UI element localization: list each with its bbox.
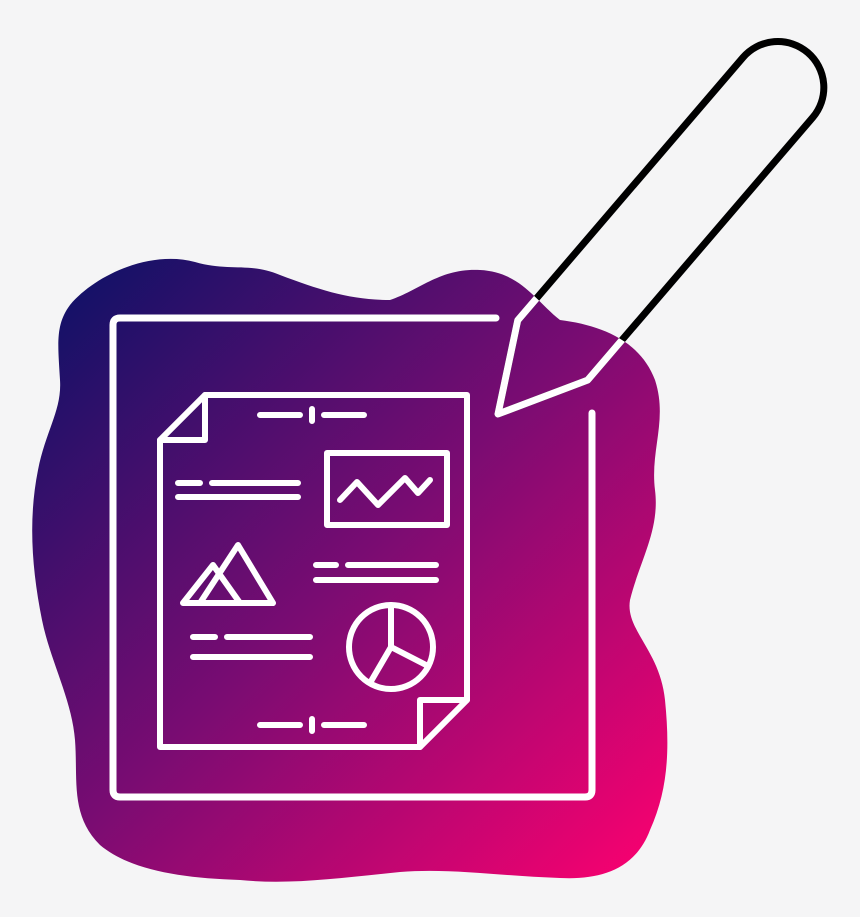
mountains icon: [183, 545, 273, 603]
pie chart: [349, 605, 433, 689]
document: [160, 395, 467, 747]
blob background: [32, 259, 667, 882]
text lines left top: [178, 483, 298, 497]
pencil white part over blob: [494, 296, 625, 418]
header dashes: [260, 409, 364, 421]
pencil: [463, 23, 843, 444]
chart box: [327, 453, 447, 525]
page outline: [160, 395, 467, 747]
text lines left bottom: [193, 637, 310, 657]
frame: [113, 318, 592, 797]
footer dashes: [260, 719, 364, 731]
text lines right: [316, 565, 436, 580]
